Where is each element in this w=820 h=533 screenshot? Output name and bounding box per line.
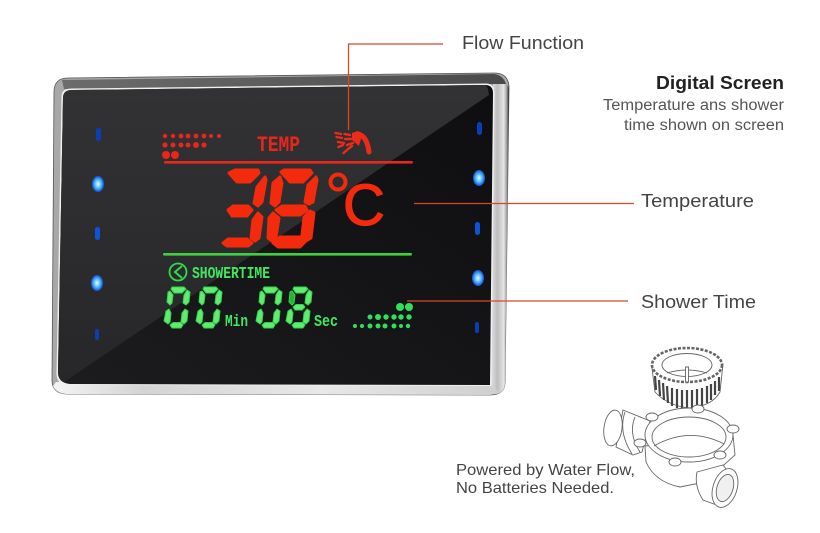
icon: shower — [336, 131, 369, 153]
shower time reading — [164, 287, 312, 328]
right pipe — [696, 465, 737, 507]
degree symbol — [330, 174, 346, 190]
SHOWERTIME label: SHOWERTIME — [192, 265, 270, 284]
icon: clock — [170, 264, 186, 280]
label: temperature: Temperature — [641, 191, 754, 211]
description — [603, 97, 784, 134]
frame highlight — [56, 84, 494, 386]
callout line: flow function — [348, 44, 443, 130]
Min label: Min — [225, 313, 248, 332]
gear — [652, 348, 723, 408]
celsius C: C — [343, 173, 385, 238]
caption: powered by water flow: No Batteries Needed. — [456, 480, 614, 497]
right touch lights — [472, 122, 485, 333]
Sec label: Sec — [314, 313, 338, 332]
red divider — [164, 161, 413, 164]
frame bottom edge — [53, 382, 500, 395]
screen glare — [58, 85, 489, 382]
flange — [645, 408, 733, 462]
caption: powered by water flow — [456, 462, 635, 497]
green divider — [163, 253, 412, 256]
label: flow function: Flow Function — [462, 33, 584, 53]
description: time shown on screen — [624, 117, 784, 134]
illustration: flow meter — [602, 348, 743, 511]
label: shower time: Shower Time — [641, 292, 756, 312]
caption: powered by water flow: Powered by Water Flow, — [456, 462, 635, 479]
heading: digital screen: Digital Screen — [656, 73, 784, 93]
housing — [602, 405, 743, 511]
callout line: shower time — [407, 300, 628, 302]
description: Temperature ans shower — [603, 97, 784, 114]
frame right edge — [488, 84, 509, 394]
metal frame — [52, 73, 509, 395]
green dot level indicator — [353, 303, 413, 328]
frame top edge — [62, 74, 506, 89]
temperature reading 38 — [223, 170, 317, 247]
TEMP label: TEMP — [257, 133, 300, 158]
left touch lights — [91, 128, 104, 340]
left pipe — [616, 410, 650, 455]
red dot level indicator — [162, 134, 221, 159]
device panel — [52, 73, 509, 395]
callout line: temperature — [414, 202, 634, 204]
screen — [58, 85, 493, 385]
lower body — [645, 435, 735, 487]
